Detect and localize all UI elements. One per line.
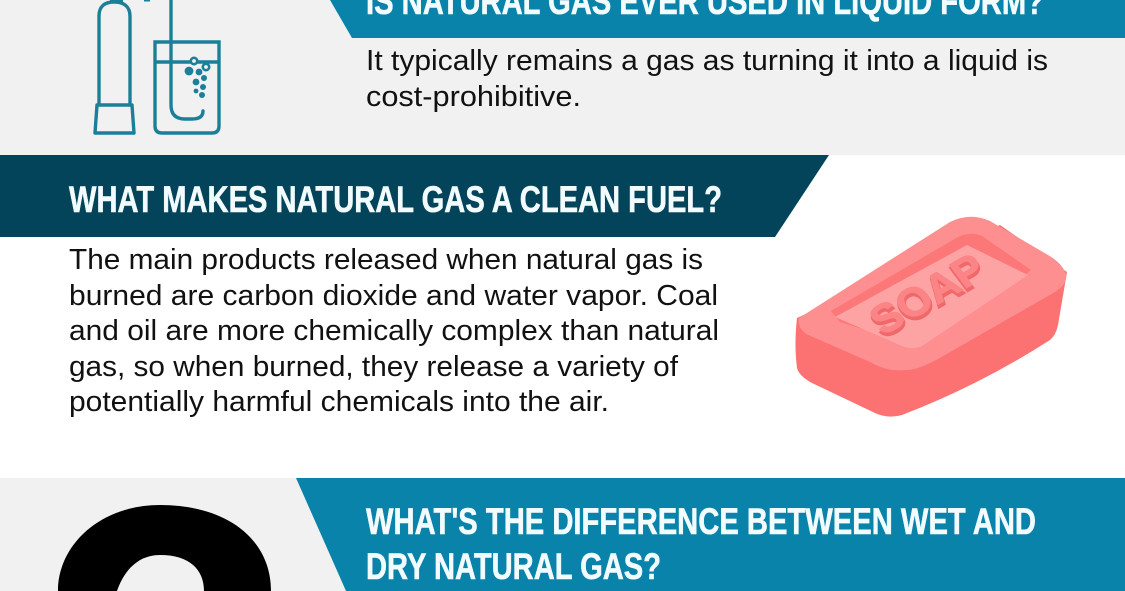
heading: clean fuel: WHAT MAKES NATURAL GAS A CLEAN FUEL? <box>69 179 722 220</box>
text block: clean fuel answer: The main products released when natural gas is <box>69 244 703 276</box>
text block: clean fuel answer <box>69 244 719 418</box>
panel: liquid form question <box>0 0 1125 155</box>
text block: clean fuel answer: burned are carbon dioxide and water vapor. Coal <box>69 280 718 312</box>
icon: gas cylinder and beaker <box>95 0 219 133</box>
text block: clean fuel answer: potentially harmful chemicals into the air. <box>69 386 609 418</box>
heading: wet and dry <box>366 501 1036 587</box>
heading banner: wet and dry <box>296 478 1125 591</box>
panel: wet and dry gas question <box>0 478 1125 591</box>
icon: question mark <box>58 505 271 591</box>
soap label: SOAP <box>861 248 996 346</box>
text block: liquid form answer: cost-prohibitive. <box>366 81 581 113</box>
panel: clean fuel heading banner <box>0 155 829 237</box>
text block: clean fuel answer: and oil are more chemically complex than natural <box>69 315 719 347</box>
heading: wet and dry: DRY NATURAL GAS? <box>366 546 661 587</box>
soap label: SOAP <box>860 245 995 343</box>
text block: liquid form answer <box>366 45 1048 113</box>
text block: clean fuel answer: gas, so when burned, they release a variety of <box>69 351 679 383</box>
text block: liquid form answer: It typically remains a gas as turning it into a liquid is <box>366 45 1048 77</box>
icon: bar of soap <box>796 217 1067 417</box>
heading banner: liquid form <box>330 0 1125 38</box>
